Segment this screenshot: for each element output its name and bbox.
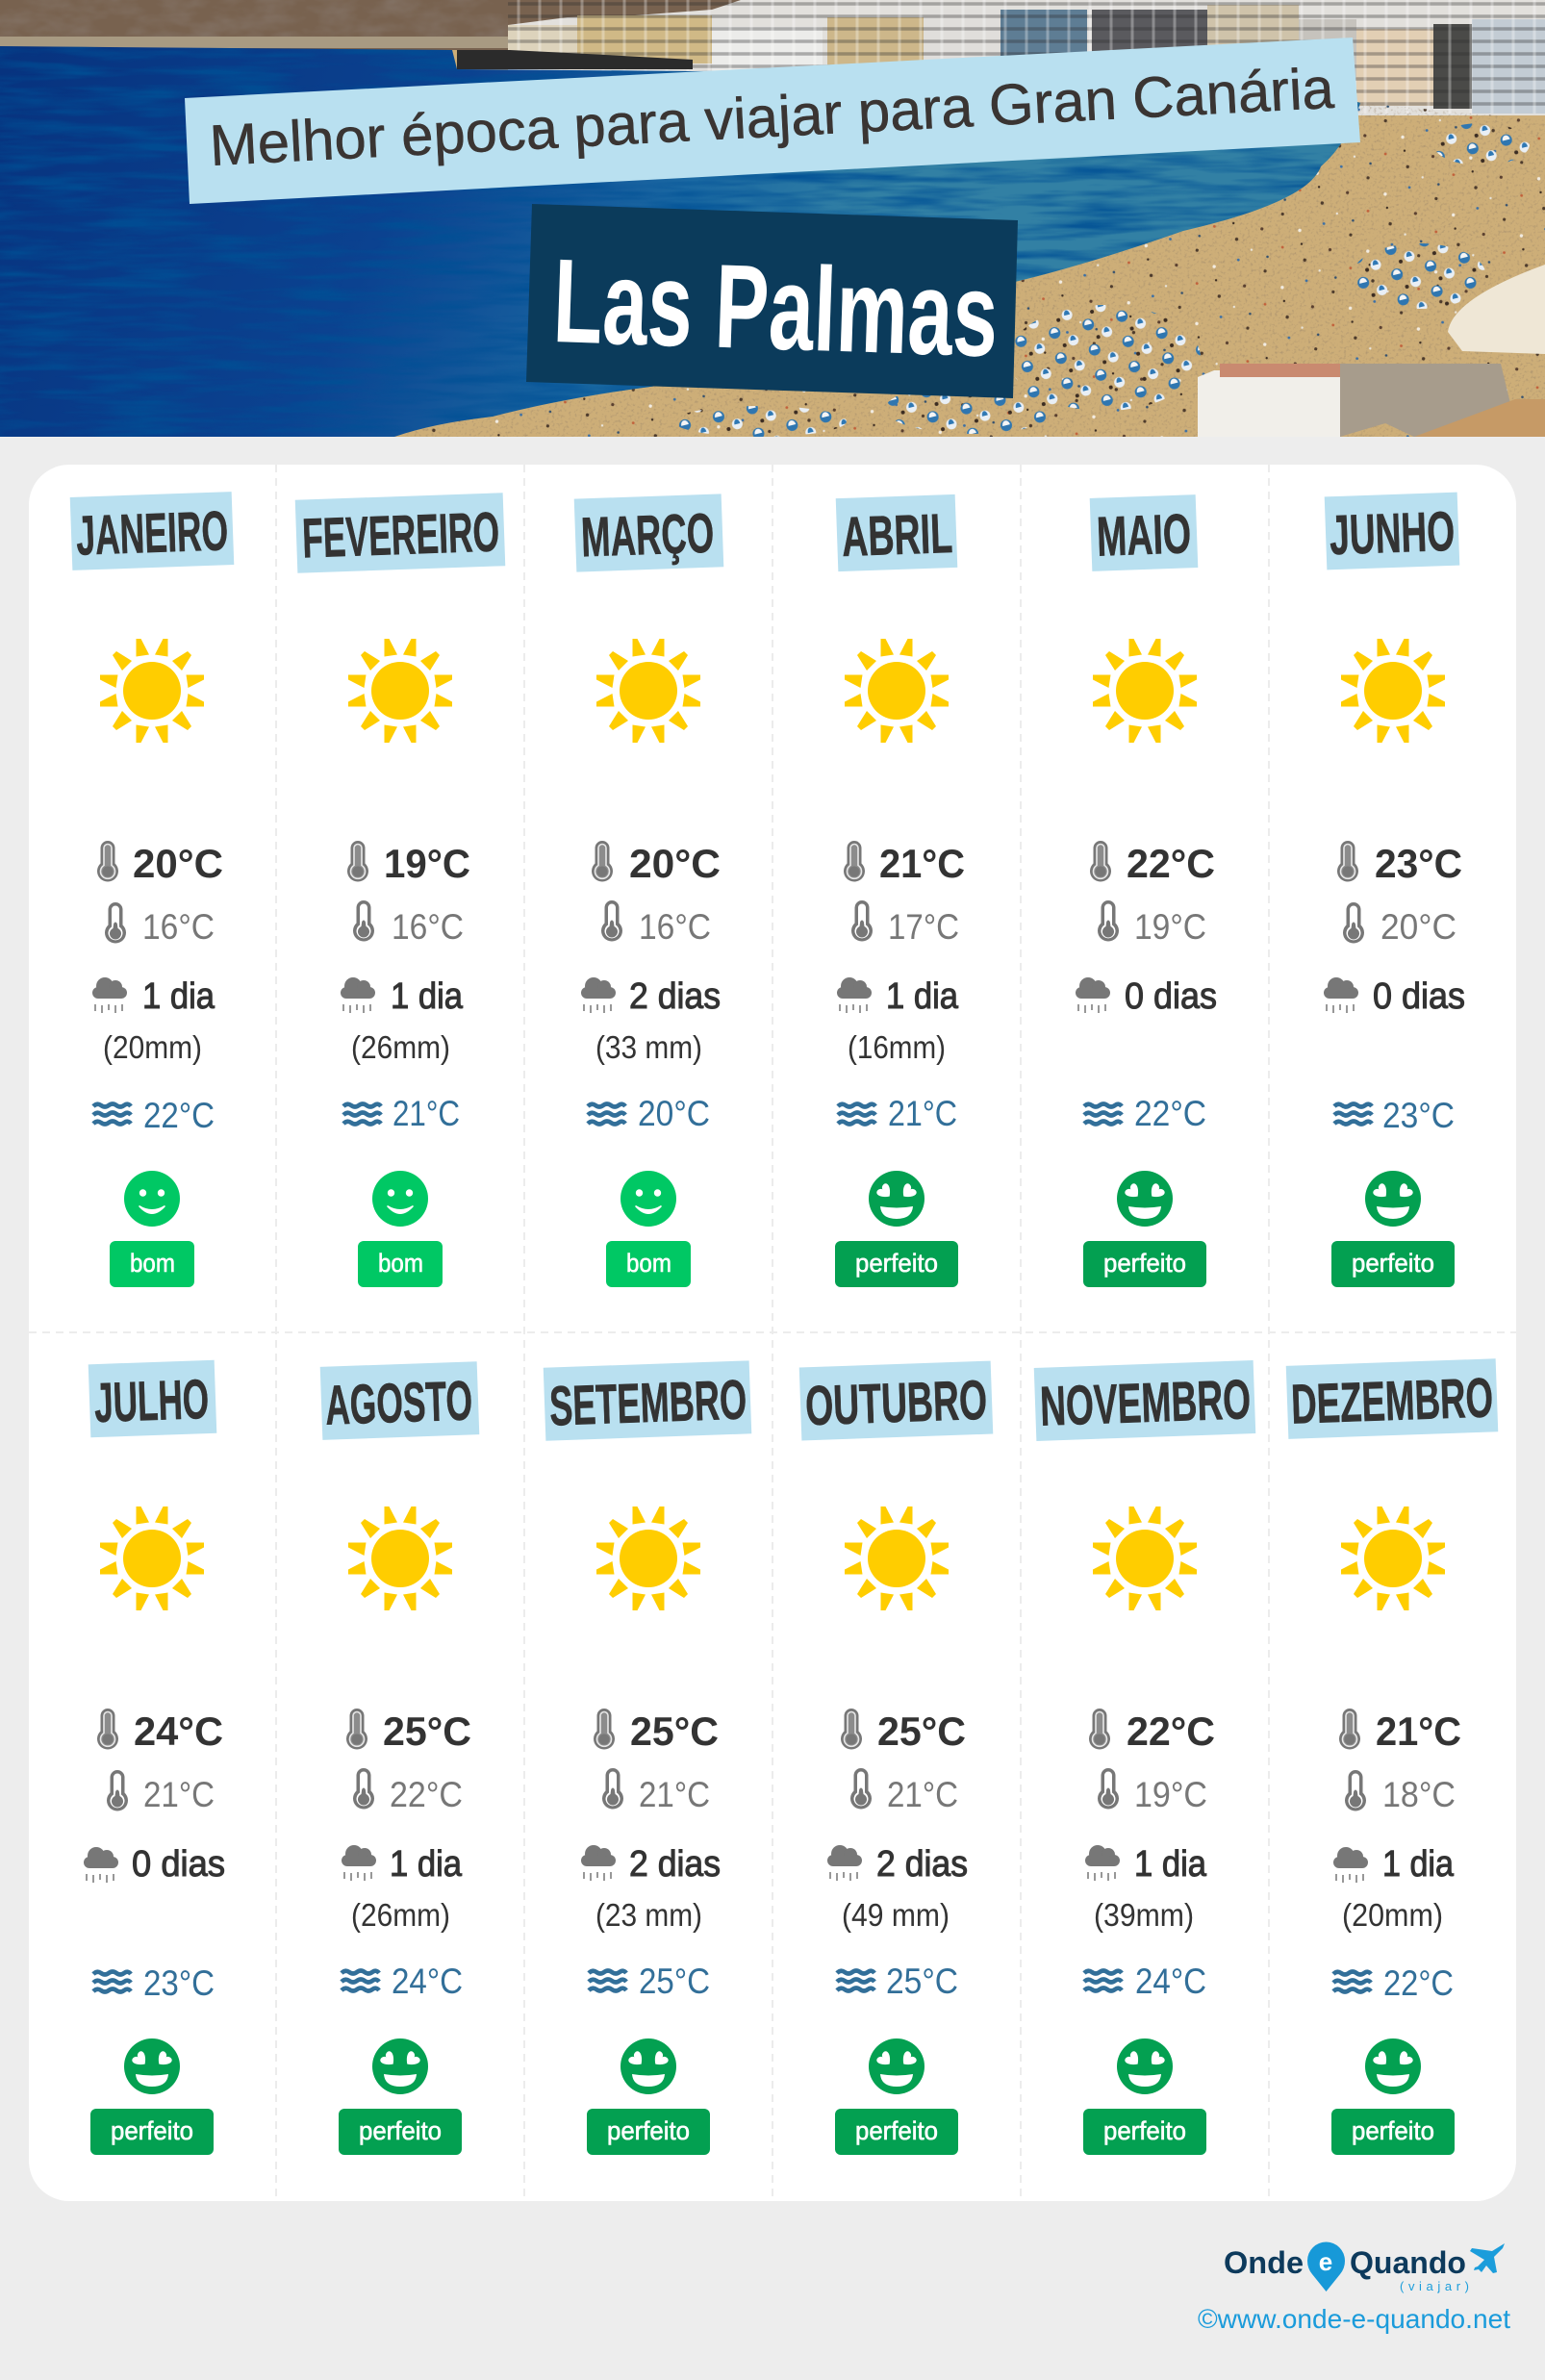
month label bbox=[1325, 493, 1459, 570]
month label: ABRIL bbox=[841, 502, 953, 569]
rainy days: (26mm) bbox=[351, 1029, 450, 1065]
max temperature bbox=[1339, 1709, 1461, 1754]
max temperature: 20°C bbox=[133, 841, 223, 886]
min temperature bbox=[353, 900, 464, 947]
icon: sun bbox=[1341, 1506, 1445, 1610]
rainy days bbox=[1085, 1844, 1207, 1933]
sea temperature bbox=[1333, 1963, 1454, 2003]
icon: map pin bbox=[1307, 2241, 1345, 2291]
sea temperature: 22°C bbox=[143, 1096, 215, 1135]
rating: perfeito: perfeito bbox=[1103, 1249, 1186, 1278]
min temperature bbox=[601, 900, 711, 947]
sea temperature bbox=[93, 1963, 215, 2003]
month label: FEVEREIRO bbox=[301, 500, 500, 570]
month label: JULHO bbox=[93, 1368, 210, 1434]
icon: sun bbox=[1093, 639, 1197, 743]
sea temperature: 21°C bbox=[393, 1094, 460, 1133]
rating: bom: bom bbox=[378, 1249, 423, 1278]
rainy days: 0 dias bbox=[1373, 976, 1465, 1017]
rating: perfeito bbox=[1331, 1171, 1455, 1287]
rainy days bbox=[837, 976, 959, 1065]
max temperature bbox=[594, 1709, 719, 1754]
min temperature: 16°C bbox=[392, 907, 464, 947]
icon: sun bbox=[100, 1506, 204, 1610]
rating: perfeito: perfeito bbox=[359, 2116, 442, 2145]
min temperature bbox=[851, 900, 959, 947]
rainy days bbox=[342, 1844, 463, 1933]
rating: bom bbox=[110, 1171, 194, 1287]
month label bbox=[1034, 1360, 1255, 1441]
min temperature: 19°C bbox=[1134, 1775, 1207, 1814]
min temperature bbox=[1098, 900, 1206, 947]
rainy days bbox=[581, 1844, 721, 1933]
month label bbox=[89, 1360, 216, 1437]
sea temperature bbox=[838, 1094, 957, 1133]
sea temperature bbox=[837, 1962, 958, 2001]
min temperature bbox=[105, 902, 215, 947]
month: março bbox=[574, 494, 723, 1287]
sea temperature bbox=[1084, 1962, 1206, 2001]
rainy days: 1 dia bbox=[1382, 1844, 1455, 1885]
min temperature: 22°C bbox=[390, 1775, 463, 1814]
sea temperature bbox=[343, 1094, 460, 1133]
sea temperature: 24°C bbox=[1135, 1962, 1206, 2001]
max temperature bbox=[1090, 841, 1215, 886]
rating: bom bbox=[606, 1171, 691, 1287]
max temperature bbox=[347, 841, 470, 886]
max temperature: 19°C bbox=[384, 841, 470, 886]
max temperature: 23°C bbox=[1375, 841, 1462, 886]
month label bbox=[836, 494, 957, 571]
icon: airplane bbox=[1470, 2243, 1505, 2273]
rating: perfeito bbox=[90, 2038, 214, 2155]
month: abril bbox=[835, 494, 965, 1287]
max temperature bbox=[1089, 1709, 1215, 1754]
rainy days bbox=[1324, 976, 1465, 1017]
max temperature: 21°C bbox=[879, 841, 965, 886]
rainy days bbox=[827, 1844, 968, 1933]
rainy days bbox=[84, 1844, 225, 1885]
rainy days: 2 dias bbox=[876, 1844, 968, 1885]
rating: bom bbox=[358, 1171, 443, 1287]
min temperature bbox=[602, 1768, 710, 1814]
icon: sun bbox=[348, 1506, 452, 1610]
min temperature: 16°C bbox=[142, 907, 215, 947]
sea temperature: 24°C bbox=[392, 1962, 463, 2001]
rainy days: (26mm) bbox=[351, 1897, 450, 1933]
sea temperature: 22°C bbox=[1383, 1963, 1454, 2003]
min temperature bbox=[1098, 1768, 1207, 1814]
banner: city title: Las Palmas bbox=[551, 235, 1000, 382]
month: julho bbox=[84, 1360, 225, 2155]
rating: bom: bom bbox=[626, 1249, 671, 1278]
banner: subtitle: Melhor época para viajar para Gran Canária bbox=[208, 56, 1336, 178]
footer website credit: ©www.onde-e-quando.net bbox=[1198, 2304, 1510, 2334]
rainy days: 2 dias bbox=[629, 1844, 721, 1885]
month label: JANEIRO bbox=[75, 499, 229, 568]
max temperature: 25°C bbox=[630, 1709, 719, 1754]
month: maio bbox=[1076, 494, 1217, 1287]
max temperature: 24°C bbox=[134, 1709, 223, 1754]
min temperature: 19°C bbox=[1134, 907, 1206, 947]
rainy days bbox=[92, 976, 215, 1065]
month: setembro bbox=[544, 1360, 751, 2155]
rainy days: (20mm) bbox=[103, 1029, 202, 1065]
month label bbox=[799, 1361, 993, 1440]
rainy days: (23 mm) bbox=[595, 1897, 702, 1933]
icon: map pin: e bbox=[1319, 2247, 1332, 2276]
sea temperature: 25°C bbox=[639, 1962, 710, 2001]
rating: perfeito bbox=[1083, 1171, 1206, 1287]
rainy days bbox=[1333, 1844, 1455, 1933]
rainy days: 0 dias bbox=[1125, 976, 1217, 1017]
icon: sun bbox=[845, 1506, 949, 1610]
sea temperature: 21°C bbox=[888, 1094, 957, 1133]
min temperature bbox=[1345, 1770, 1456, 1814]
min temperature: 17°C bbox=[888, 907, 959, 947]
max temperature bbox=[346, 1709, 471, 1754]
month: outubro bbox=[799, 1361, 993, 2155]
month label bbox=[1090, 494, 1198, 571]
max temperature: 21°C bbox=[1376, 1709, 1461, 1754]
rainy days bbox=[581, 976, 721, 1065]
min temperature bbox=[353, 1768, 463, 1814]
icon: sun bbox=[596, 639, 700, 743]
rainy days bbox=[341, 976, 464, 1065]
month label bbox=[295, 493, 505, 573]
sea temperature bbox=[1084, 1094, 1206, 1133]
month label: NOVEMBRO bbox=[1039, 1368, 1252, 1438]
rainy days: 0 dias bbox=[132, 1844, 225, 1885]
month label: AGOSTO bbox=[324, 1369, 473, 1437]
logo: Onde e Quando: Onde bbox=[1224, 2245, 1304, 2280]
month label bbox=[544, 1360, 751, 1441]
logo: Onde e Quando: (viajar) bbox=[1400, 2279, 1469, 2293]
min temperature: 21°C bbox=[887, 1775, 958, 1814]
rating: perfeito bbox=[339, 2038, 462, 2155]
rating: perfeito: perfeito bbox=[111, 2116, 193, 2145]
rainy days: 1 dia bbox=[886, 976, 959, 1017]
month label: OUTUBRO bbox=[804, 1369, 988, 1437]
min temperature: 16°C bbox=[639, 907, 711, 947]
rating: perfeito bbox=[835, 1171, 958, 1287]
rating: perfeito: perfeito bbox=[1103, 2116, 1186, 2145]
rainy days bbox=[1076, 976, 1217, 1017]
sea temperature: 22°C bbox=[1134, 1094, 1206, 1133]
rainy days: 1 dia bbox=[142, 976, 215, 1017]
rating: bom: bom bbox=[130, 1249, 175, 1278]
icon: sun bbox=[1341, 639, 1445, 743]
banner: city title bbox=[526, 204, 1018, 398]
max temperature bbox=[844, 841, 965, 886]
rainy days: (49 mm) bbox=[842, 1897, 950, 1933]
month label: MARÇO bbox=[580, 502, 715, 569]
month label: SETEMBRO bbox=[548, 1368, 747, 1438]
rating: perfeito: perfeito bbox=[855, 2116, 938, 2145]
sea temperature bbox=[342, 1962, 463, 2001]
icon: sun bbox=[1093, 1506, 1197, 1610]
rating: perfeito bbox=[587, 2038, 710, 2155]
rating: perfeito: perfeito bbox=[607, 2116, 690, 2145]
month label: MAIO bbox=[1096, 502, 1192, 569]
max temperature bbox=[1337, 841, 1462, 886]
min temperature bbox=[1343, 902, 1456, 947]
rating: perfeito bbox=[835, 2038, 958, 2155]
max temperature bbox=[841, 1709, 966, 1754]
rainy days: (16mm) bbox=[848, 1029, 946, 1065]
max temperature: 22°C bbox=[1127, 841, 1215, 886]
month: novembro bbox=[1034, 1360, 1255, 2155]
max temperature: 25°C bbox=[383, 1709, 471, 1754]
sea temperature bbox=[93, 1096, 215, 1135]
month label bbox=[574, 494, 723, 572]
sea temperature: 20°C bbox=[638, 1094, 710, 1133]
min temperature: 21°C bbox=[143, 1775, 215, 1814]
icon: sun bbox=[596, 1506, 700, 1610]
rainy days: (33 mm) bbox=[595, 1029, 702, 1065]
logo: Onde e Quando bbox=[1224, 2241, 1505, 2293]
rainy days: 2 dias bbox=[629, 976, 721, 1017]
hero photo: beach of Las Palmas bbox=[0, 0, 1545, 437]
sea temperature bbox=[588, 1094, 710, 1133]
month label: JUNHO bbox=[1329, 500, 1456, 567]
min temperature: 21°C bbox=[639, 1775, 710, 1814]
rating: perfeito bbox=[1331, 2038, 1455, 2155]
month: dezembro bbox=[1286, 1358, 1498, 2155]
month label bbox=[320, 1361, 479, 1440]
sea temperature bbox=[1334, 1096, 1455, 1135]
panel: monthly calendar card bbox=[29, 465, 1516, 2201]
min temperature: 18°C bbox=[1382, 1775, 1456, 1814]
rating: perfeito: perfeito bbox=[855, 1249, 938, 1278]
icon: sun bbox=[845, 639, 949, 743]
rainy days: 1 dia bbox=[390, 1844, 463, 1885]
max temperature: 20°C bbox=[629, 841, 721, 886]
rainy days: (39mm) bbox=[1094, 1897, 1194, 1933]
logo: Onde e Quando: Quando bbox=[1350, 2245, 1466, 2280]
month: fevereiro bbox=[295, 493, 505, 1287]
rating: perfeito bbox=[1083, 2038, 1206, 2155]
sea temperature: 23°C bbox=[1382, 1096, 1455, 1135]
rainy days: 1 dia bbox=[391, 976, 464, 1017]
min temperature bbox=[107, 1770, 215, 1814]
sea temperature: 23°C bbox=[143, 1963, 215, 2003]
icon: sun bbox=[348, 639, 452, 743]
rainy days: 1 dia bbox=[1134, 1844, 1207, 1885]
icon: sun bbox=[100, 639, 204, 743]
min temperature bbox=[850, 1768, 958, 1814]
min temperature: 20°C bbox=[1380, 907, 1456, 947]
rainy days: (20mm) bbox=[1342, 1897, 1443, 1933]
sea temperature bbox=[589, 1962, 710, 2001]
month label bbox=[70, 492, 234, 570]
month: agosto bbox=[320, 1361, 479, 2155]
month: junho bbox=[1324, 493, 1465, 1287]
rating: perfeito: perfeito bbox=[1352, 1249, 1434, 1278]
max temperature: 25°C bbox=[877, 1709, 966, 1754]
rating: perfeito: perfeito bbox=[1352, 2116, 1434, 2145]
sea temperature: 25°C bbox=[886, 1962, 958, 2001]
month: janeiro bbox=[70, 492, 234, 1287]
max temperature: 22°C bbox=[1127, 1709, 1215, 1754]
